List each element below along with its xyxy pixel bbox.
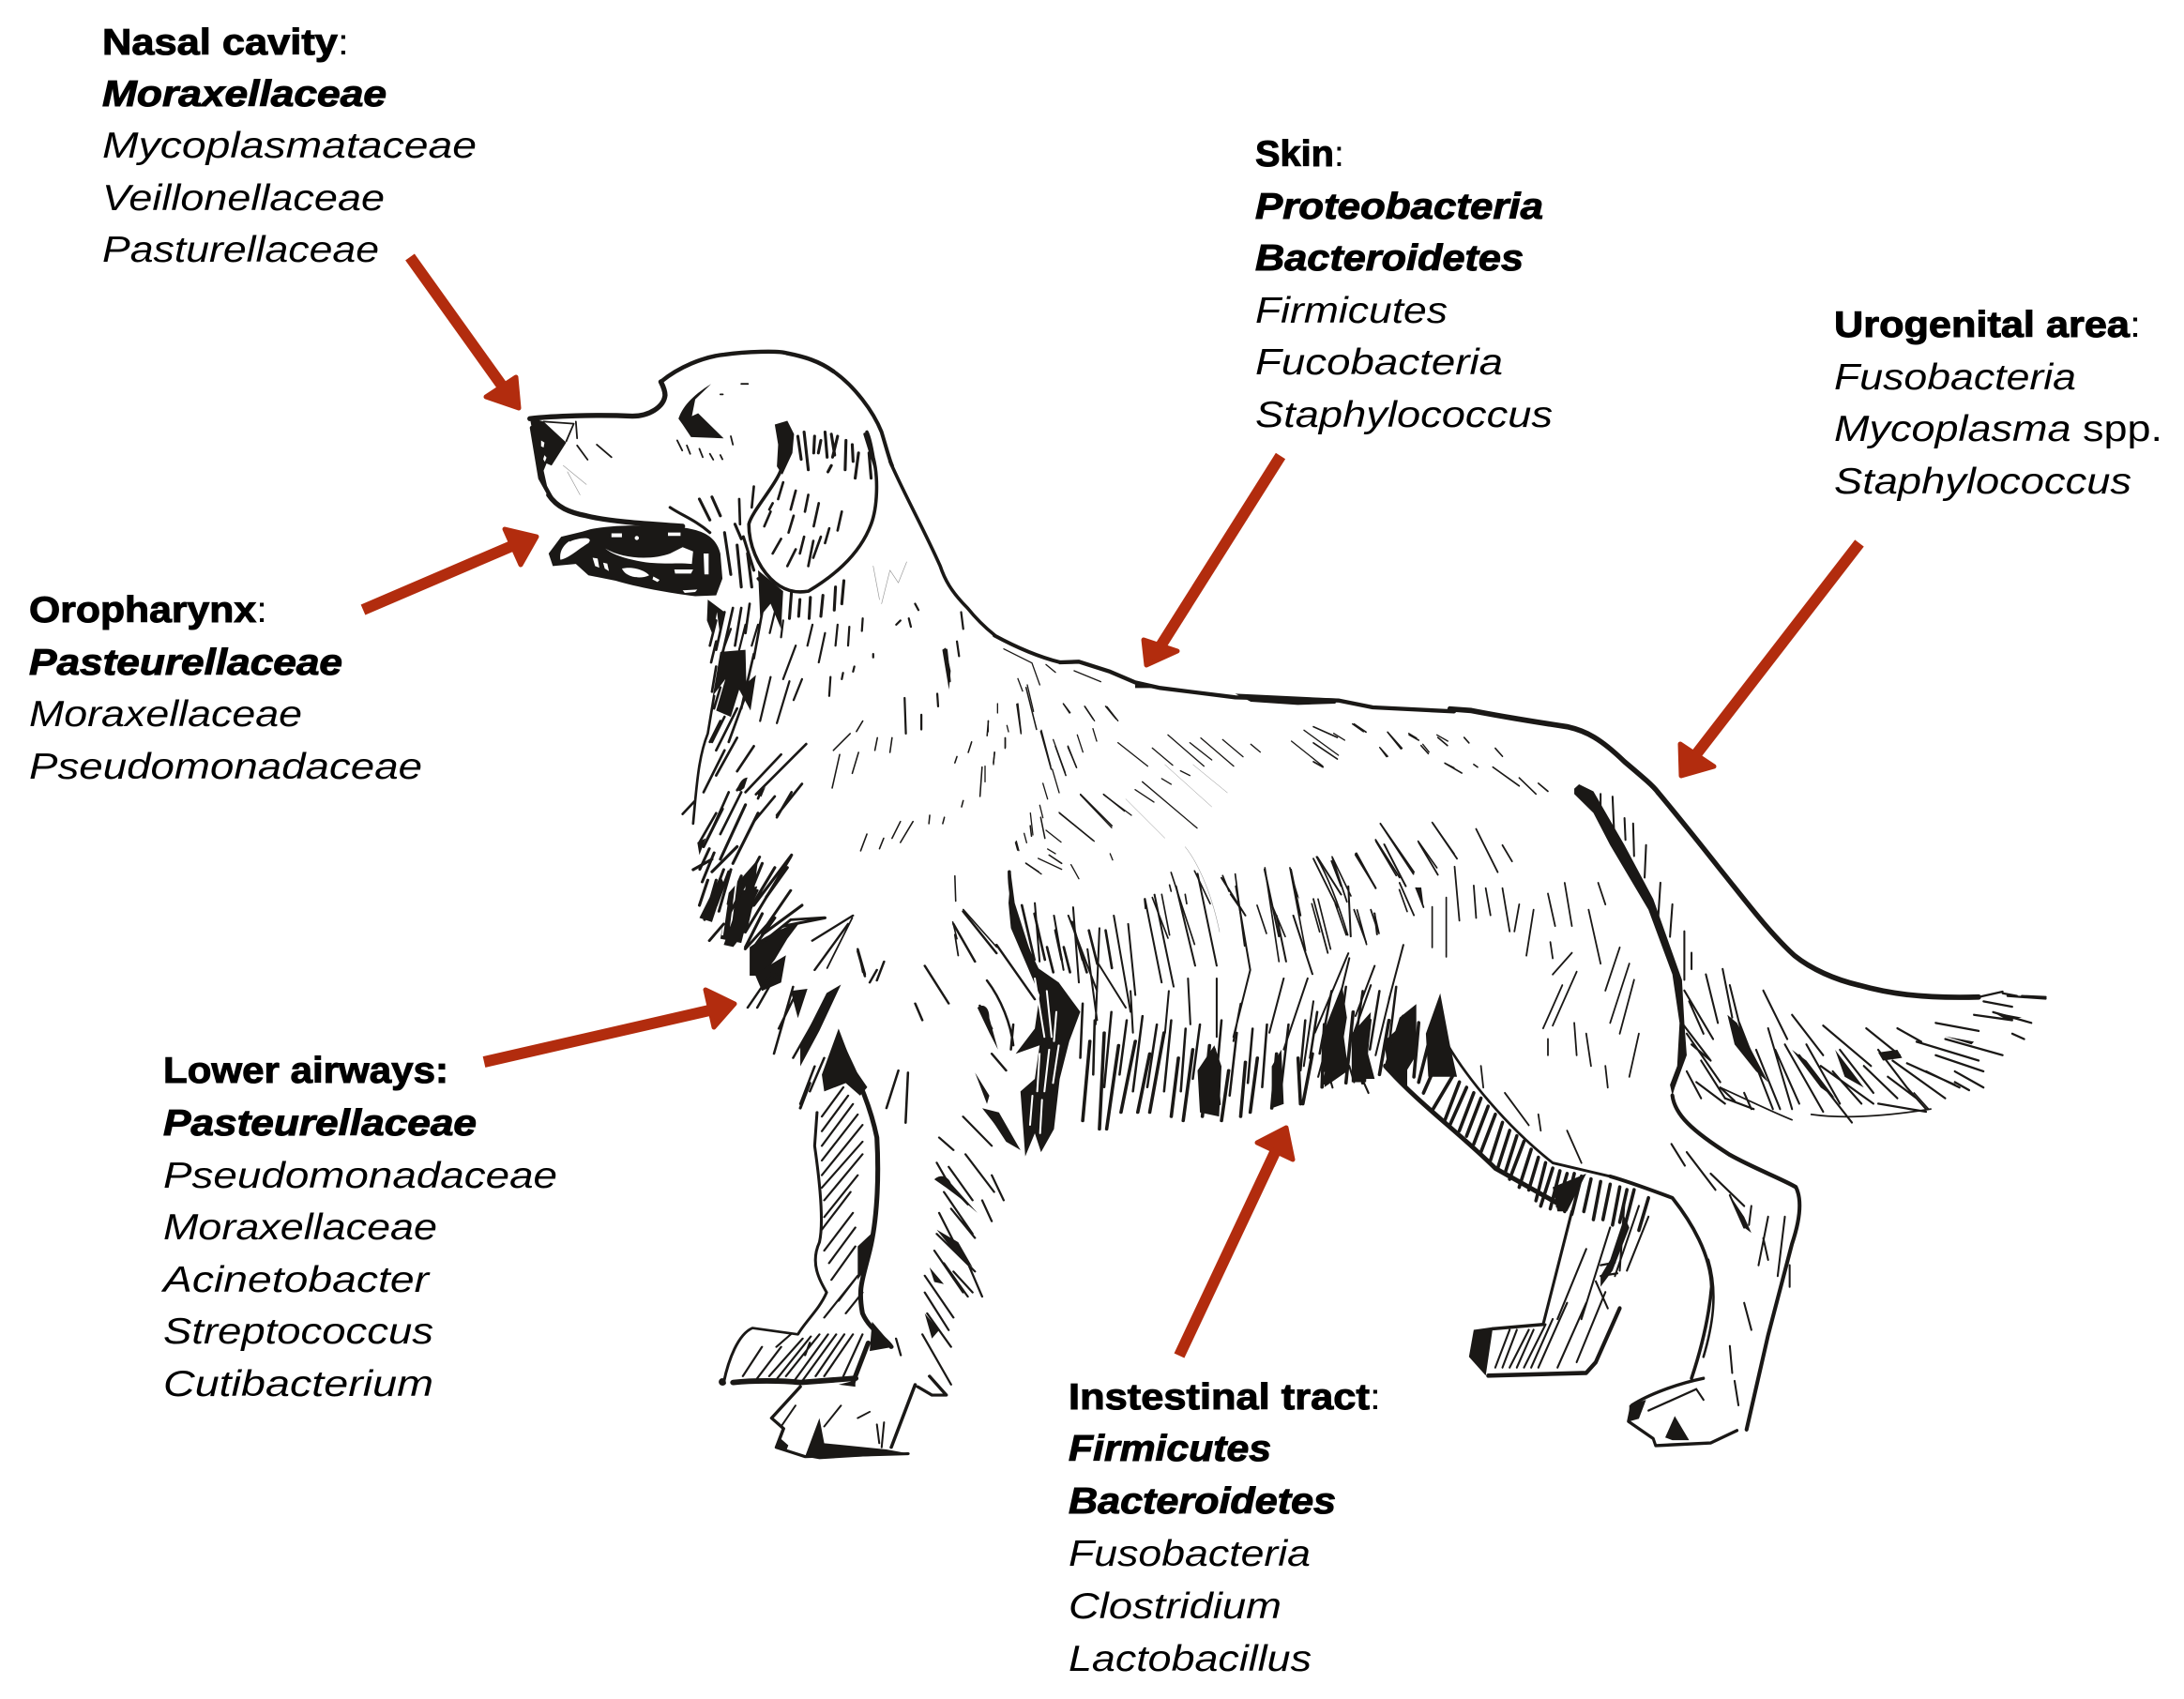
dog head, neck and chest bbox=[530, 352, 1125, 976]
text block: lower airways: Pseudomonadaceae bbox=[163, 1156, 557, 1196]
arrow: skin bbox=[1144, 456, 1281, 665]
text block: intestinal tract: Lactobacillus bbox=[1069, 1639, 1312, 1679]
text block: skin: Staphylococcus bbox=[1255, 395, 1553, 435]
dog belly fur and front legs bbox=[700, 844, 1407, 1459]
text block: lower airways: Streptococcus bbox=[163, 1312, 433, 1352]
arrow: intestinal tract bbox=[1179, 1128, 1293, 1356]
dog back line and upper body fur bbox=[985, 635, 1454, 962]
text block: intestinal tract: Firmicutes bbox=[1069, 1429, 1271, 1469]
illustration: golden retriever ink drawing bbox=[530, 352, 2046, 1459]
text block: intestinal tract bbox=[1069, 1377, 1381, 1679]
text block: urogenital area: Mycoplasma spp. bbox=[1834, 409, 2162, 449]
text block: lower airways: Moraxellaceae bbox=[163, 1207, 437, 1248]
text block: skin: Proteobacteria bbox=[1255, 187, 1543, 227]
text block: lower airways bbox=[161, 1051, 557, 1404]
text block: intestinal tract: Bacteroidetes bbox=[1069, 1481, 1336, 1522]
text block: intestinal tract: Fusobacteria bbox=[1069, 1534, 1311, 1574]
text block: nasal cavity: Mycoplasmataceae bbox=[102, 126, 477, 166]
text block: intestinal tract: Instestinal tract : bbox=[1069, 1377, 1381, 1418]
text block: urogenital area: Fusobacteria bbox=[1834, 357, 2076, 398]
text block: nasal cavity: Moraxellaceae bbox=[102, 74, 387, 114]
arrow: lower airways bbox=[484, 990, 735, 1062]
text block: intestinal tract: Clostridium bbox=[1069, 1586, 1282, 1627]
text block: skin bbox=[1255, 134, 1553, 435]
text block: lower airways: Pasteurellaceae bbox=[163, 1103, 477, 1144]
text block: lower airways: Lower airways: bbox=[163, 1051, 448, 1091]
text block: nasal cavity bbox=[102, 23, 477, 270]
text block: oropharynx: Moraxellaceae bbox=[29, 694, 302, 735]
text block: oropharynx: Pasteurellaceae bbox=[29, 643, 342, 683]
text block: oropharynx bbox=[29, 590, 422, 787]
text block: lower airways: Cutibacterium bbox=[163, 1364, 433, 1404]
text block: urogenital area bbox=[1834, 305, 2162, 502]
text block: oropharynx: Oropharynx : bbox=[29, 590, 267, 630]
text block: oropharynx: Pseudomonadaceae bbox=[29, 747, 422, 787]
text block: nasal cavity: Pasturellaceae bbox=[102, 230, 379, 270]
text block: lower airways: Acinetobacter bbox=[161, 1260, 431, 1300]
text block: nasal cavity: Veillonellaceae bbox=[102, 178, 385, 219]
text block: skin: Bacteroidetes bbox=[1255, 238, 1524, 279]
arrow: urogenital area bbox=[1680, 543, 1859, 776]
arrow: nasal cavity bbox=[410, 257, 519, 408]
text block: skin: Skin: bbox=[1255, 134, 1344, 174]
text block: skin: Firmicutes bbox=[1255, 291, 1448, 331]
dog hindquarters, hind legs and tail bbox=[1304, 709, 2046, 1446]
text block: urogenital area: Urogenital area : bbox=[1834, 305, 2141, 345]
text block: urogenital area: Staphylococcus bbox=[1834, 462, 2131, 502]
text block: skin: Fucobacteria bbox=[1255, 342, 1503, 383]
arrow: oropharynx bbox=[363, 529, 537, 610]
text block: nasal cavity: Nasal cavity : bbox=[102, 23, 349, 63]
